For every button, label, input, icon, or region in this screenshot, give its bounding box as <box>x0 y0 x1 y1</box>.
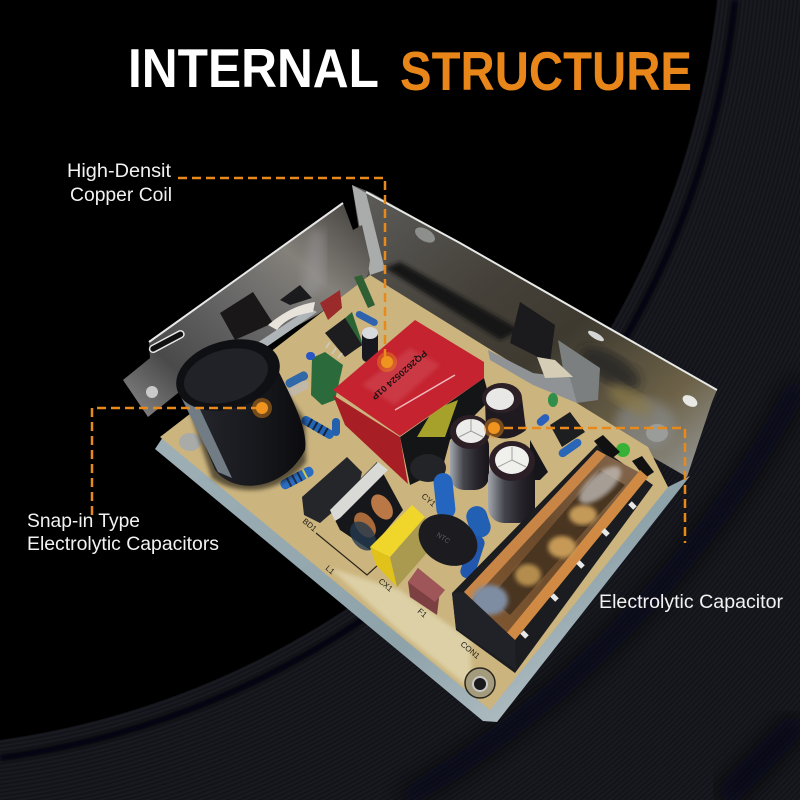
small component: red capacitor <box>320 290 342 320</box>
board: dotted lighter solder area <box>330 568 472 690</box>
board: silkscreen labels and traces: BD1 <box>301 517 319 534</box>
callout: snap-in capacitors: Electrolytic Capacitors <box>27 533 219 555</box>
small component: black transistor on left wall <box>220 292 273 340</box>
board: silkscreen labels and traces <box>301 492 482 661</box>
fuse block <box>408 568 445 615</box>
board: silkscreen labels and traces: CY1 <box>420 492 438 509</box>
black common-mode inductor block <box>302 457 362 523</box>
callout: copper coil <box>67 160 397 372</box>
callout: electrolytic capacitor: Electrolytic Capacitor <box>599 591 783 613</box>
circuit board <box>160 275 668 710</box>
small component: green capacitor <box>337 312 363 352</box>
NTC thermistor: NTC <box>435 532 451 546</box>
callout: snap-in capacitors <box>27 398 272 555</box>
callout: copper coil: Copper Coil <box>70 184 172 206</box>
common mode choke with copper winding <box>330 462 403 555</box>
back wall of metal tray <box>352 185 717 477</box>
large snap-in electrolytic capacitor <box>168 328 306 490</box>
callout: copper coil: High-Densit <box>67 160 172 182</box>
board: silkscreen labels and traces: L1 <box>324 564 337 577</box>
terminal block with amber cover <box>452 435 654 673</box>
red transformer housing: PQ2620524 01P <box>370 348 429 402</box>
small component: black IC chip <box>325 318 362 358</box>
callout: electrolytic capacitor <box>484 418 783 613</box>
board: silkscreen labels and traces: CON1 <box>459 640 482 661</box>
small component: blue resistor top <box>355 310 379 327</box>
yellow X capacitor <box>370 505 432 587</box>
red transformer housing <box>333 320 490 485</box>
left wall of metal tray with flange <box>123 203 370 417</box>
callout: snap-in capacitors: Snap-in Type <box>27 510 140 532</box>
small component: back-row parts <box>535 393 585 459</box>
small component: small black capacitor <box>362 327 378 362</box>
title: INTERNAL <box>128 37 379 99</box>
mounting screw hole <box>465 668 495 698</box>
small component: green LED <box>616 443 630 457</box>
small component: large green capacitor <box>311 352 343 405</box>
board: silkscreen labels and traces: CX1 <box>377 577 395 594</box>
product: power supply unit <box>123 185 717 722</box>
NTC thermistor <box>409 504 487 576</box>
small component: white cable <box>268 302 315 330</box>
title: STRUCTURE <box>400 40 692 102</box>
right heat sink and metal clip <box>488 302 600 403</box>
small component: black cable tie <box>280 285 312 305</box>
board: silkscreen labels and traces: F1 <box>416 607 429 620</box>
small electrolytic capacitors <box>450 383 548 523</box>
tray rim <box>155 437 690 722</box>
small component: tall green capacitor <box>354 275 375 308</box>
small component: screw on right <box>646 424 668 442</box>
left corner board screw <box>179 433 201 451</box>
title <box>128 37 692 102</box>
blue ceramic capacitors <box>433 472 493 580</box>
small component: striped resistors <box>279 352 340 491</box>
